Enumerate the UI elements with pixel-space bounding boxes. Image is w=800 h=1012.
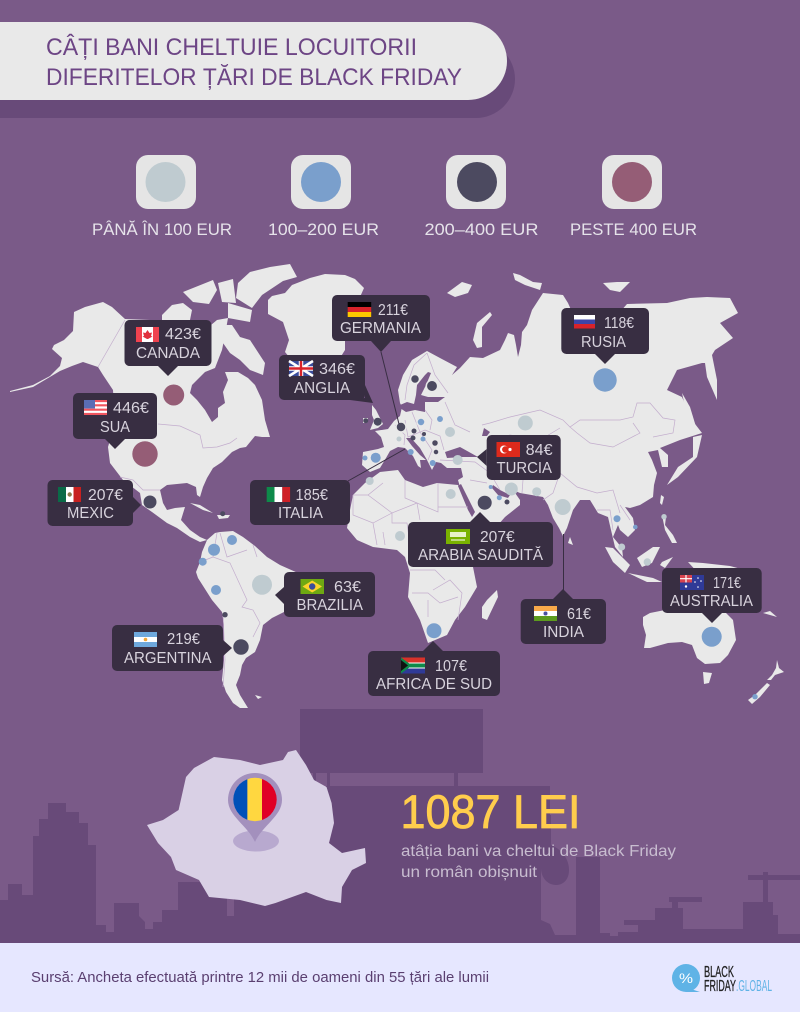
world map [10, 264, 784, 708]
legend item: 200-400 EUR: 200–400 EUR [424, 220, 538, 239]
flag: Argentina [134, 632, 157, 647]
callout: Brazilia: BRAZILIA [296, 597, 363, 614]
callout: Turcia: TURCIA [496, 460, 552, 477]
source text: Sursă: Ancheta efectuată printre 12 mii de oameni din 55 țări ale lumii [31, 970, 489, 986]
legend item: up to 100 EUR: PÂNĂ ÎN 100 EUR [92, 220, 232, 239]
callout: Argentina: ARGENTINA [124, 650, 212, 667]
callout: Germania [332, 295, 430, 424]
flag: USA [84, 400, 107, 415]
subtext [401, 843, 676, 881]
callout: Rusia [561, 308, 649, 364]
callout: Anglia [279, 355, 373, 403]
callout: Anglia: 346€ [319, 361, 355, 378]
city skyline background [0, 709, 800, 943]
legend item: over 400 EUR [570, 155, 697, 239]
flag: Australia [680, 575, 704, 590]
callout: Italia: 185€ [296, 487, 328, 504]
legend item: 100-200 EUR: 100–200 EUR [268, 220, 379, 239]
callout: Italia [250, 449, 405, 525]
callout: Brazilia: 63€ [334, 579, 361, 596]
callout: Arabia Saudita: ARABIA SAUDITĂ [418, 545, 543, 564]
callout: Arabia Saudita [408, 512, 553, 567]
title banner: DIFERITELOR ȚĂRI DE BLACK FRIDAY [46, 64, 462, 91]
callout: Mexic [48, 480, 141, 526]
legend item: up to 100 EUR [92, 155, 232, 239]
flag: Mexico [58, 487, 81, 502]
subtext: un român obișnuit [401, 864, 538, 881]
callout: Canada: 423€ [165, 326, 201, 343]
flag: South Africa [401, 658, 425, 674]
land masses [10, 264, 784, 708]
callout: Africa de Sud: AFRICA DE SUD [376, 676, 492, 693]
billboard [300, 709, 483, 773]
callout: India: 61€ [567, 606, 591, 623]
flag: Germany [348, 302, 371, 317]
callout: Anglia: ANGLIA [294, 380, 350, 397]
flag: Italy [267, 487, 290, 502]
callout: India: INDIA [543, 624, 584, 641]
callout: India [521, 534, 606, 644]
logo: BLACK [704, 964, 734, 981]
logo [672, 964, 772, 995]
callout: SUA [73, 393, 157, 449]
title banner [0, 22, 515, 118]
callout: SUA: SUA [100, 419, 130, 436]
callout: Mexic: MEXIC [67, 505, 114, 522]
country borders [98, 320, 675, 687]
legend item: 200-400 EUR [424, 155, 538, 239]
callout: Turcia [477, 435, 561, 480]
pin with Romanian flag [228, 773, 282, 842]
Romania map with pin [147, 750, 366, 906]
logo: % [679, 970, 693, 986]
callout: Australia: AUSTRALIA [670, 593, 753, 610]
callout: Africa de Sud [368, 641, 500, 696]
callout: SUA: 446€ [113, 400, 149, 417]
title banner: CÂȚI BANI CHELTUIE LOCUITORII [46, 34, 417, 61]
subtext: atâția bani va cheltui de Black Friday [401, 843, 676, 860]
callout: Turcia: 84€ [526, 442, 553, 459]
flag: Russia [574, 315, 595, 328]
headline figure: 1087 LEI [400, 785, 580, 838]
callout: Germania: GERMANIA [340, 320, 421, 337]
flag: Saudi Arabia [446, 529, 470, 544]
callout: Canada: CANADA [136, 345, 200, 362]
callout: Rusia: RUSIA [581, 334, 626, 351]
legend item: over 400 EUR: PESTE 400 EUR [570, 220, 697, 239]
callout: Italia: ITALIA [278, 505, 323, 522]
flag: UK [289, 361, 313, 376]
callout: Argentina: 219€ [167, 631, 200, 648]
data bubbles [132, 368, 758, 699]
flag: Brazil [300, 579, 324, 594]
legend item: 100-200 EUR [268, 155, 379, 239]
callout: Arabia Saudita: 207€ [480, 529, 515, 546]
callout: Germania: 211€ [378, 302, 408, 319]
flag: Turkey [496, 442, 520, 457]
callout: Rusia: 118€ [604, 315, 634, 332]
callout: Argentina [112, 625, 232, 671]
logo: FRIDAY [704, 978, 736, 995]
callout: Africa de Sud: 107€ [435, 658, 467, 675]
callout: Mexic: 207€ [88, 487, 123, 504]
pin shadow [233, 830, 279, 852]
flag: Canada [136, 327, 159, 342]
callout: Australia: 171€ [713, 575, 741, 592]
inland seas [124, 372, 510, 517]
legend [92, 155, 697, 239]
footer [0, 943, 800, 1012]
callout: Australia [662, 568, 762, 623]
callout: Canada [124, 320, 212, 376]
flag: India [534, 606, 557, 621]
callout: Brazilia [275, 572, 375, 617]
